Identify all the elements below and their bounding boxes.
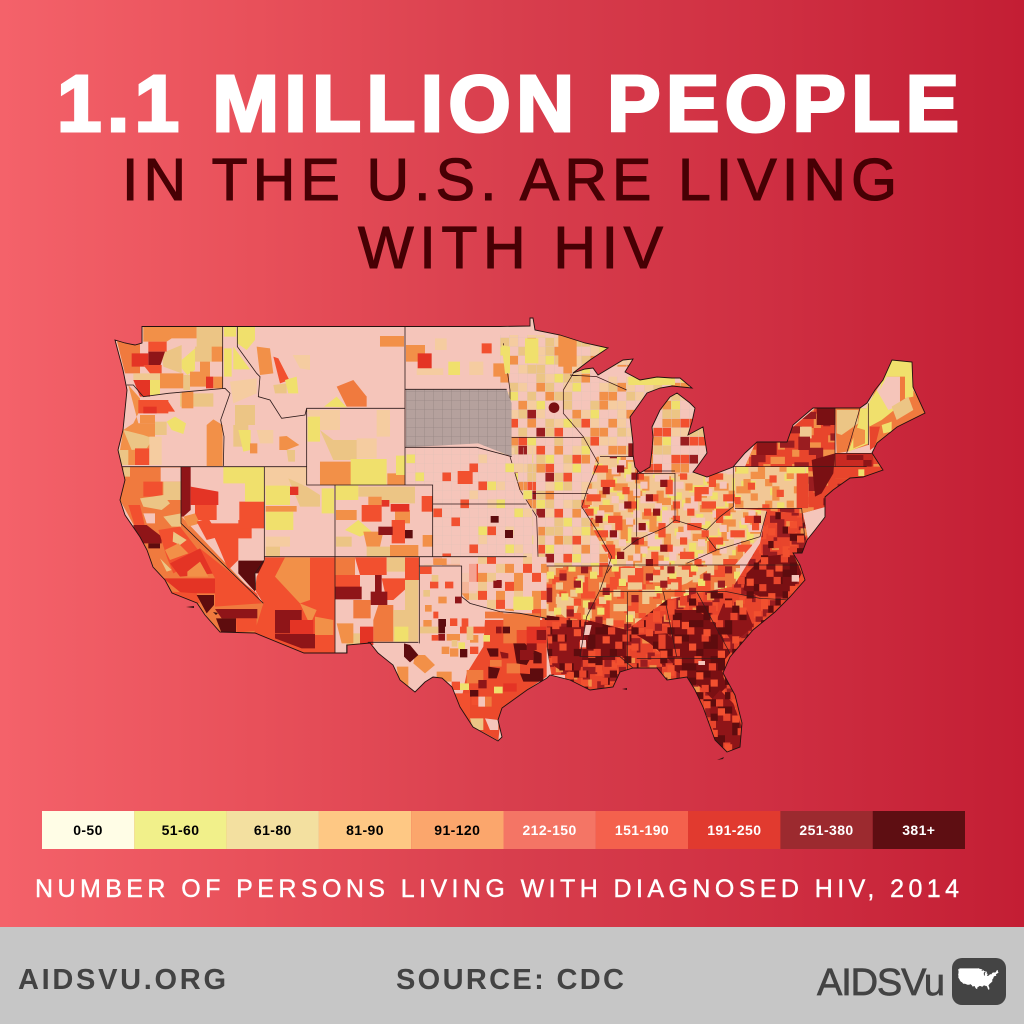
footer: website: AIDSVU.ORG [18,964,226,996]
east counties [156,335,924,752]
legend: 51-60 [162,822,199,838]
map coastline [115,318,925,752]
subtitle [122,147,897,281]
colorado [358,487,415,503]
subtitle: WITH HIV [358,215,664,281]
legend: 191-250 [707,822,761,838]
footer bar [0,927,1024,1024]
new mexico [404,643,405,644]
icon: AIDSVu logo with US map [952,958,1006,1005]
legend: 81-90 [346,822,384,838]
legend: 251-380 [799,822,854,838]
oklahoma [424,556,547,618]
nevada [181,467,191,517]
legend: 61-80 [254,822,292,838]
caption: NUMBER OF PERSONS LIVING WITH DIAGNOSED HIV, 2014 [35,875,959,903]
legend: 151-190 [615,822,669,838]
south dakota no data [406,389,516,459]
north dakota [406,345,425,362]
oregon [120,385,155,465]
subtitle: IN THE U.S. ARE LIVING [122,147,897,213]
utah [265,467,307,495]
islands [186,606,724,760]
wyoming [307,410,390,458]
title: 1.1 million people: 1.1 MILLION PEOPLE [57,59,959,148]
legend: 381+ [902,822,935,838]
map: US county choropleth [116,318,924,752]
west counties [116,327,876,740]
texas [396,558,552,740]
east state lines [503,343,872,673]
footer: source: SOURCE: CDC [396,964,624,996]
idaho and montana [224,327,255,377]
legend: 91-120 [434,822,480,838]
arizona [254,557,335,653]
legend: 212-150 [523,822,577,838]
california [120,467,263,633]
new england [835,358,927,478]
legend [42,811,965,849]
legend: 0-50 [73,822,103,838]
west state lines [122,327,547,653]
plains squares [406,448,534,556]
washington [143,327,197,342]
logo wordmark: AIDSVu [817,962,945,1004]
